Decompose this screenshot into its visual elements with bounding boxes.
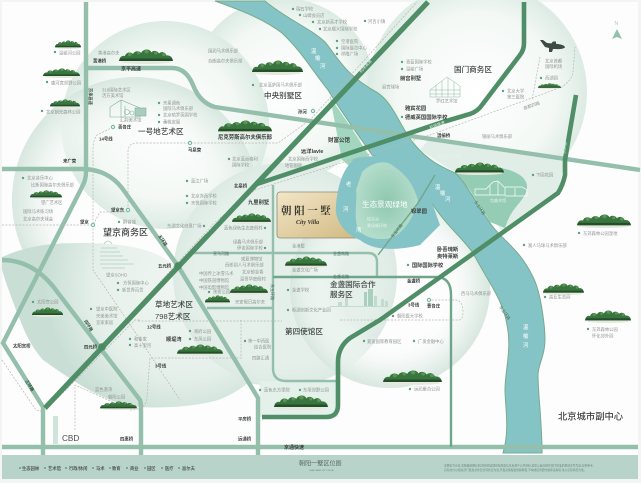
place labels: dark — [13, 58, 459, 451]
place labels: dark: 金盏桥 — [407, 278, 421, 284]
POI labels: grey: 国际学校 — [232, 162, 250, 168]
river and park white labels: 榆 — [440, 189, 446, 197]
place labels: dark: 奥特莱斯 — [437, 252, 459, 260]
POI labels: grey: 望京中医院 — [96, 306, 118, 312]
district headings — [62, 64, 624, 443]
nodes: interchanges — [98, 262, 182, 351]
POI labels: grey: 群音城 — [123, 218, 137, 226]
POI labels: grey: 番桃皮展 — [163, 118, 181, 126]
title card — [277, 192, 359, 238]
POI labels: grey: 将府公园 — [194, 328, 211, 335]
legend: 医疗 — [165, 465, 174, 471]
place labels: dark: 远通桥 — [238, 436, 252, 442]
district headings: 望京商务区 — [103, 226, 148, 238]
river and park white labels: 景绿循环地 — [367, 222, 387, 228]
place labels: dark: 来广营 — [63, 158, 77, 164]
district headings: 北京城市副中心 — [558, 410, 624, 422]
POI labels: grey: 蓝色东方里院 — [264, 386, 290, 394]
POI labels: grey: 怀化郊外园 — [592, 332, 613, 340]
place labels: dark: 3号线 — [155, 362, 167, 370]
POI labels: grey: 空港医院 — [341, 38, 359, 45]
POI labels: grey: 北京首都 — [545, 58, 563, 64]
place labels: dark: 温榆桥 — [437, 132, 451, 139]
river and park white labels: 老 — [346, 180, 352, 188]
subtitle: City Villa: City Villa — [296, 220, 319, 226]
park: museum green — [455, 165, 527, 228]
POI labels: grey: 望京SOHO — [106, 272, 128, 278]
POI labels: grey: 温哥华度假村 — [240, 276, 266, 282]
icon: airplane — [540, 40, 565, 52]
icon: north arrow — [612, 21, 622, 39]
river and park white labels: 悦东谷 — [367, 216, 379, 222]
icon: trees — [577, 214, 631, 228]
place labels: dark: 北皋桥 — [234, 182, 248, 190]
river and park white labels: 河 — [445, 195, 451, 203]
illustration: river museum — [475, 181, 527, 196]
POI labels: grey: 结合医院 — [254, 344, 272, 350]
road labels along roads: 京承路 — [560, 141, 568, 154]
POI labels: grey: 北京国际西学校 — [288, 156, 319, 162]
place labels: dark: 望京东 — [111, 206, 125, 212]
illustration: Jinzhan skyline — [330, 289, 388, 307]
POI labels: grey: 第一中西医 — [248, 338, 270, 344]
icon: trees — [585, 310, 631, 323]
POI labels: grey: 北京郁金香 — [242, 268, 264, 276]
district headings: 金盏国际合作 — [330, 279, 376, 289]
POI labels: grey: 蓝色港湾 — [95, 386, 113, 393]
road labels along roads: 机场二高速 — [202, 216, 220, 235]
river and park white labels: 生态景观绿地 — [362, 199, 408, 209]
POI labels: grey: 新世界百货 — [122, 286, 144, 294]
disclaimer: 本图仅为示意,非精确地图比例,项目周边规划及配套信息来源于公开资料,具体以政府相关部门批准的规划文件为准,仅供参考, — [444, 464, 594, 468]
legend: 艺术馆 — [48, 465, 62, 472]
POI labels: grey: 北京顺义国际学校 — [323, 26, 358, 32]
POI labels: grey: 北京哈罗英国学校 — [163, 112, 198, 118]
icon: trees — [119, 50, 173, 64]
POI labels: grey: 东湖文化创意广场 — [167, 222, 202, 230]
icon: trees — [32, 307, 63, 317]
icon: trees — [218, 120, 272, 134]
road labels along roads: 四环路 — [82, 318, 95, 333]
legend: 教育 — [112, 465, 121, 472]
POI labels: grey: 东风公园 — [194, 336, 211, 342]
island: eco landscape green — [356, 162, 418, 239]
POI labels: grey: 天安假日高尔夫 — [235, 298, 266, 306]
icon: trees — [30, 190, 62, 199]
zone: Jinzhan — [290, 188, 490, 388]
icon: trees — [177, 344, 223, 356]
place labels: dark: 曹各庄 — [427, 302, 441, 310]
road labels along roads: 东五环路 — [498, 304, 512, 321]
POI labels: grey: 国际马术练习场 — [23, 208, 54, 215]
legend: 园区 — [147, 466, 156, 472]
legend: 生态园林 — [22, 465, 40, 472]
map subtitle: CHAOYANG CITY VILLA — [309, 469, 334, 472]
place labels: dark: 京平高速 — [121, 66, 141, 72]
legend: 高尔夫 — [182, 465, 196, 472]
river and park white labels: 包美术馆 — [490, 197, 506, 203]
zone: riverside wedge — [420, 138, 565, 232]
road labels along roads: 东五环路 — [389, 222, 404, 239]
icon: north arrow: N — [614, 21, 618, 27]
lake around eco green — [336, 155, 440, 249]
POI labels: grey: 爱迪国际教育园区 — [367, 338, 402, 345]
legend: 商业 — [130, 465, 139, 472]
district headings: 国门商务区 — [454, 64, 492, 74]
POI labels: grey: 比斯国际高尔夫俱乐部 — [31, 182, 75, 188]
POI labels: grey: 绿鑫马术俱乐部 — [233, 238, 264, 246]
road labels along roads: 东五环路 — [473, 199, 487, 216]
POI labels: grey: 康河宽郊野公园 — [51, 80, 81, 86]
place labels: dark: 平房桥 — [238, 416, 252, 422]
district headings: 第四使馆区 — [285, 326, 323, 336]
illustration: CBD tower — [53, 416, 58, 444]
POI labels: grey: 天悦国际学校 — [191, 200, 217, 206]
icon: trees — [285, 256, 327, 268]
road labels along roads: 东五环路 — [270, 284, 276, 300]
disclaimer: 实际交付以相关部门批准文件及合同约定为准,开发商保留最终解释权,不构成任何要约或承诺事项,请以实际情况为准。 — [444, 468, 587, 472]
place labels: dark: 太阳宫桥 — [13, 342, 31, 350]
POI labels: grey: 河百小镇 — [368, 18, 386, 25]
icon: trees — [55, 40, 81, 49]
place labels: dark: 12号线 — [147, 324, 161, 330]
POI labels: grey: 北京蓝台格利 — [232, 156, 258, 162]
POI labels: grey: 北京高尔夫球会 — [23, 216, 54, 222]
icon: trees — [383, 370, 442, 385]
POI labels: grey: 伊诺国际学校 — [237, 244, 263, 252]
district headings: 草地艺术区 — [155, 299, 193, 309]
road: river roadside — [378, 175, 435, 255]
POI labels: grey: 首都四路 — [522, 99, 541, 112]
bottom band — [2, 455, 638, 479]
POI labels: grey: 温榆广场 — [406, 66, 424, 72]
place labels: dark: 3号线 — [408, 302, 420, 308]
zone: Guomen business district — [367, 0, 587, 202]
POI labels: grey: 西湖园 — [545, 74, 558, 82]
nodes: subway stations — [91, 109, 431, 302]
POI labels: grey: 运润雁合公园 — [414, 386, 440, 392]
icon: trees — [543, 283, 584, 295]
POI labels: grey: 瑞石学校 — [296, 6, 314, 12]
POI labels: grey: 黄港高尔夫 — [98, 50, 120, 56]
POI labels: grey: 广发金融中心 — [418, 338, 444, 345]
strip: left bank green — [330, 97, 372, 175]
road labels along roads: 机场高速 — [357, 58, 373, 74]
place labels: dark: 14号线 — [99, 136, 113, 142]
river and park white labels: 英骑士俱乐部 — [437, 153, 461, 159]
POI labels: grey: 汇韵美术馆 — [120, 116, 142, 124]
zone: central — [173, 163, 397, 387]
road labels along roads: 三环路 — [23, 378, 36, 393]
place labels: dark: 四惠桥 — [120, 436, 134, 442]
POI labels: grey: 金盏学校 — [292, 286, 310, 294]
map title: 朝阳一墅区位图 — [299, 460, 342, 468]
POI labels: grey: 蓝色绿色生态度假村 — [224, 224, 263, 232]
district headings: CBD — [62, 434, 79, 443]
POI labels: grey: 活方美术馆 — [102, 92, 124, 99]
legend: 行政/休闲 — [69, 465, 87, 472]
POI markers — [22, 8, 589, 391]
POI labels: grey: 望广艺术区 — [41, 199, 63, 206]
POI labels: grey: 丽宫球场 — [382, 84, 400, 90]
disclaimer — [444, 464, 594, 472]
POI labels: grey: 蓝江广场 — [191, 178, 209, 184]
POI labels: grey: 金港墅 — [292, 242, 306, 250]
icon: trees — [274, 396, 328, 410]
river and park white labels: 河 — [343, 205, 349, 213]
POI labels: grey: 西郎别人马术俱乐部 — [225, 262, 264, 268]
icon: trees — [538, 83, 561, 89]
river and park white labels: 河 — [320, 62, 326, 70]
zone: central villas — [191, 0, 375, 182]
POI labels: grey: 北京新英才学校 — [317, 18, 348, 26]
zone: No.1 art district — [61, 21, 269, 229]
POI labels: grey: 央美美术馆 — [96, 312, 118, 320]
POI labels: grey: 北京音乐中心 — [27, 174, 53, 182]
road labels along roads: 机场高速 — [428, 119, 445, 130]
river and park white labels: 榆 — [523, 332, 529, 340]
POI labels: grey: 天星调色 — [163, 100, 181, 106]
POI labels: grey: 北京亦西学校 — [191, 192, 217, 200]
POI labels: grey: 观复博物馆 — [241, 256, 263, 262]
zone: embassy block — [260, 381, 338, 417]
place labels: dark: 德威英国国际学校 — [405, 113, 448, 121]
place labels: dark: 尼克劳斯高尔夫俱乐部 — [218, 133, 273, 141]
place labels: dark: 顺堤湾 — [166, 335, 182, 343]
road network: subway dashed lines — [2, 2, 575, 430]
road labels along roads: 五环路 — [156, 233, 170, 248]
place labels: dark: 京通快速 — [284, 444, 304, 451]
road labels along roads — [23, 58, 568, 393]
river and park white labels: 河 — [523, 341, 529, 349]
POI labels: grey: 黑桥公园 — [213, 288, 230, 296]
legend: 马术 — [96, 465, 105, 472]
POI labels: grey: 青蓝国际学校 — [406, 58, 432, 66]
zone: 798 art district — [2, 243, 262, 407]
POI labels: grey: 四路汇通 — [252, 354, 270, 362]
POI labels: grey: 下园花园 — [536, 172, 553, 178]
place labels: dark: 雅宾花园 — [405, 104, 426, 112]
place labels: dark: 善各庄 — [118, 124, 132, 130]
river and park white labels: 温 — [311, 47, 317, 55]
POI labels: grey: 第三医院 — [507, 94, 525, 100]
river and park white labels — [311, 47, 529, 349]
POI labels: grey: 西马马术俱乐部 — [461, 290, 492, 297]
POI labels: grey: 高十里河 — [134, 342, 152, 349]
place labels: dark: 锦翠园 — [411, 207, 427, 215]
POI labels: grey: 温榆河公园 — [59, 50, 80, 56]
POI labels: grey: 宜家家居 — [96, 319, 114, 326]
place labels: dark: 远洋lavie — [301, 147, 323, 155]
POI labels: grey: 合朗高尔夫俱乐部 — [208, 58, 243, 64]
POI labels: grey: 中国传上冰雪马术 — [199, 270, 234, 277]
POI labels: grey: 山姆会员店 — [303, 12, 325, 19]
POI labels: grey: 银丽马术俱乐部 — [482, 133, 513, 140]
district headings: 服务区 — [330, 289, 353, 299]
place labels: dark: 望京 — [80, 218, 89, 224]
road labels along roads: 金盏南路 — [333, 250, 349, 256]
POI labels: grey: 东郊森林公园 — [592, 326, 618, 333]
icon: trees — [252, 60, 303, 75]
river — [215, 1, 545, 453]
icon: trees — [232, 213, 271, 224]
road labels along roads: 金盏北路 — [333, 273, 349, 279]
road labels along roads: 亮马河路 — [213, 250, 229, 256]
zone: Wangjing — [12, 77, 258, 323]
POI labels: grey: 罗红艺术馆 — [436, 98, 458, 104]
illustration: Wangjing SOHO — [100, 241, 134, 268]
POI labels: grey: 中国电影博物馆 — [199, 284, 230, 291]
icon: trees — [100, 401, 137, 410]
district headings: 中央别墅区 — [264, 90, 302, 100]
road labels along roads: 京承高速 — [87, 88, 94, 106]
POI labels: grey: 国润马术俱乐部 — [208, 48, 239, 54]
place labels: dark: 九里别墅 — [248, 198, 270, 206]
district headings: 798艺术区 — [155, 311, 191, 321]
icon: trees — [43, 68, 80, 78]
district headings: 一号地艺术区 — [138, 126, 184, 136]
road network: dark expressways — [45, 2, 576, 417]
POI labels: grey: 国际机场 — [545, 63, 563, 70]
place labels: dark: 马泉营 — [188, 146, 202, 154]
title: project name: 朝阳一墅 — [281, 204, 333, 217]
illustration: Meiluo art museum — [430, 77, 460, 97]
POI labels: grey: 金盏文化广场 — [292, 266, 318, 274]
icon: trees — [50, 99, 80, 108]
river and park white labels: 温 — [523, 323, 529, 331]
icon: trees — [230, 284, 268, 295]
POI labels: grey — [23, 6, 618, 400]
POI labels: grey: 朝阳公园 — [108, 394, 125, 400]
place labels: dark: 五元桥 — [158, 262, 172, 270]
POI labels: grey: 祥隆广场 — [341, 50, 359, 58]
place labels: dark: 四元桥 — [84, 344, 98, 350]
POI labels: grey: 朝阳医大学校 — [397, 312, 423, 320]
POI labels: grey: 和崔家 — [134, 336, 148, 342]
POI labels: grey: 318国际艺术区 — [102, 86, 131, 94]
river and park white labels: 温 — [435, 183, 441, 191]
POI labels: grey: 北京大学 — [507, 88, 525, 94]
illustration: 318 art building — [110, 100, 146, 117]
POI labels: grey: 东郊森林公园湿地 — [583, 230, 618, 237]
POI labels: grey: 北京蓝萨国马术俱乐部 — [259, 82, 303, 88]
POI labels: grey: 太阳宫公园 — [37, 298, 58, 306]
place labels: dark: 国际国际学校 — [412, 261, 444, 269]
icon: trees — [205, 295, 230, 304]
icon: trees — [455, 162, 504, 175]
place labels: dark: 黄港桥 — [93, 58, 107, 64]
POI labels: grey: 东坝郊野公园 — [303, 386, 329, 394]
place labels: dark: 卧善瑰斯 — [437, 245, 459, 253]
POI labels: grey: 枢湖创新文化产业园 — [292, 306, 331, 314]
place labels: dark: 丽宫别墅 — [400, 74, 422, 82]
place labels: dark: 孙河 — [298, 108, 307, 114]
POI labels: grey: 方恒国际中心 — [123, 280, 149, 286]
river and park white labels: 湾 — [356, 226, 362, 234]
POI labels: grey: 富人马球马术俱乐部 — [528, 242, 567, 249]
POI labels: grey: 国际展览中心 — [341, 44, 367, 52]
POI labels: grey: 高业生态园 — [549, 294, 570, 300]
POI labels: grey: 国际马术俱乐部 — [163, 105, 194, 112]
POI labels: grey: 中国铁道博物馆 — [199, 277, 230, 284]
POI labels: grey: 北京朝光森林公园 — [46, 108, 80, 116]
place labels: dark: 财富公馆 — [328, 136, 351, 144]
POI labels: grey: 地铂国际 — [285, 162, 303, 169]
river and park white labels: 榆 — [315, 54, 321, 62]
legend — [19, 465, 196, 472]
